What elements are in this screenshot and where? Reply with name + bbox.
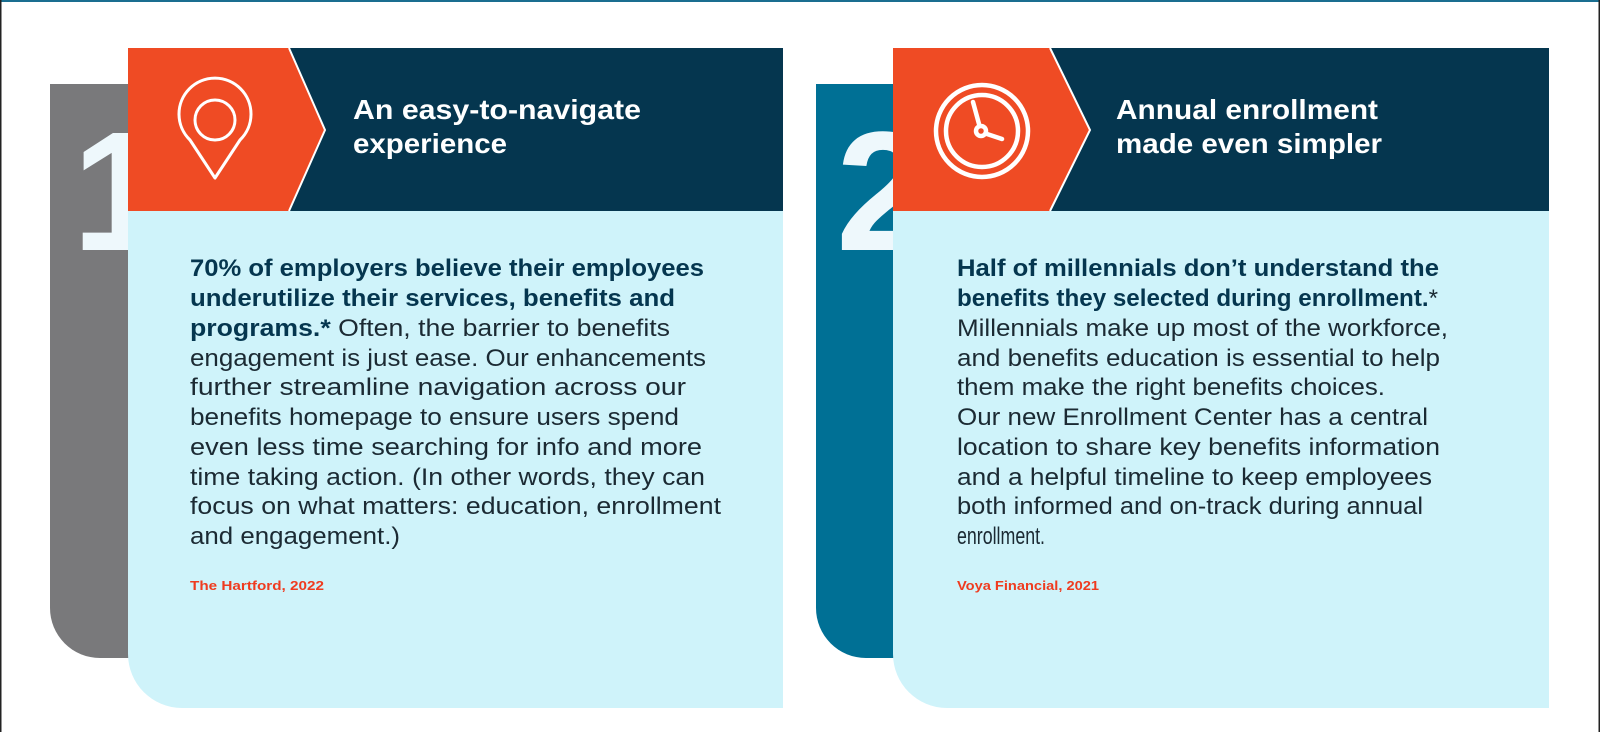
panel: card 2 <box>816 48 1549 708</box>
back tab: grey <box>50 84 140 658</box>
back tab: teal <box>816 84 906 658</box>
header <box>128 48 783 211</box>
text block: both informed and on-track during annual <box>957 493 1423 520</box>
text block: Half of millennials don’t understand the <box>957 255 1439 282</box>
number 2: 2 <box>836 97 931 287</box>
text block: Millennials make up most of the workforce, <box>957 315 1448 342</box>
text block: underutilize their services, benefits and <box>190 285 675 312</box>
source: Voya Financial, 2021 <box>957 578 1099 593</box>
text block: and engagement.) <box>190 523 400 550</box>
text block: and a helpful timeline to keep employees <box>957 464 1432 491</box>
heading: made even simpler <box>1116 128 1382 159</box>
text block: them make the right benefits choices. <box>957 374 1385 401</box>
source: The Hartford, 2022 <box>190 578 324 593</box>
text block <box>957 255 1448 550</box>
text block: benefits they selected during enrollment.* <box>957 285 1438 312</box>
text block: benefits homepage to ensure users spend <box>190 404 679 431</box>
icon: clock <box>936 85 1028 177</box>
text block: even less time searching for info and more <box>190 434 702 461</box>
text block: enrollment. <box>957 523 1045 550</box>
panel: card 1 <box>50 48 783 708</box>
header <box>893 48 1549 211</box>
heading: experience <box>353 128 507 159</box>
text block: 70% of employers believe their employees <box>190 255 704 282</box>
text block: and benefits education is essential to help <box>957 345 1440 372</box>
heading: An easy-to-navigate <box>353 94 641 125</box>
heading <box>1116 94 1382 159</box>
text block <box>190 255 721 550</box>
text block: engagement is just ease. Our enhancements <box>190 345 706 372</box>
heading: Annual enrollment <box>1116 94 1378 125</box>
body panel <box>893 211 1549 708</box>
text block: Our new Enrollment Center has a central <box>957 404 1428 431</box>
text block: further streamline navigation across our <box>190 374 686 401</box>
text block: location to share key benefits information <box>957 434 1440 461</box>
text block: time taking action. (In other words, they can <box>190 464 705 491</box>
text block: focus on what matters: education, enrollment <box>190 493 721 520</box>
text block: programs.* Often, the barrier to benefits <box>190 315 670 342</box>
number 1: 1 <box>72 97 167 287</box>
heading <box>353 94 641 159</box>
body panel <box>128 211 783 708</box>
icon: map pin <box>179 78 251 178</box>
